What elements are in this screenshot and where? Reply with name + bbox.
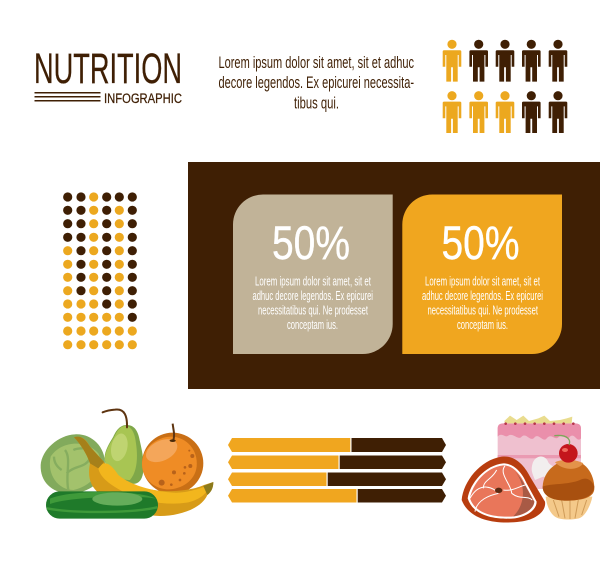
pictogram: people ratio: [443, 40, 567, 133]
icon: muffin with cherry: [543, 435, 594, 519]
bar 1: [228, 438, 446, 452]
text block: left card description: conceptam ius.: [287, 318, 338, 332]
bar 3: [228, 472, 446, 486]
text block: left card description: Lorem ipsum dolor sit amet, sit et: [255, 274, 371, 288]
icon: banana: [74, 437, 213, 516]
icon: pear: [103, 410, 144, 484]
dot matrix chart: [63, 192, 137, 349]
heading: NUTRITION: NUTRITION: [34, 45, 182, 93]
intro text block: [218, 53, 414, 112]
intro text block: Lorem ipsum dolor sit amet, sit et adhuc: [218, 53, 414, 72]
text block: right card description: conceptam ius.: [457, 318, 508, 332]
intro text block: tibus qui.: [294, 94, 339, 112]
chart: horizontal progress bars: [228, 438, 446, 502]
illustration: fruit and vegetables: [41, 410, 213, 519]
panel: right 50% card: [402, 194, 562, 354]
panel: left 50% card: [233, 194, 393, 354]
icon row 2: three of five highlighted: [443, 91, 567, 133]
intro text block: decore legendos. Ex epicurei necessita-: [218, 73, 414, 92]
illustration: meat and sweets: [462, 416, 594, 523]
text block: left card description: [252, 274, 373, 332]
icon: cucumber: [46, 491, 158, 519]
panel: dark statistics background: [188, 162, 600, 389]
bar 2: [228, 456, 446, 469]
decorative title rules: [34, 92, 100, 102]
icon: orange: [142, 424, 203, 494]
text block: right card description: [422, 274, 543, 332]
bar 4: [228, 489, 446, 502]
statistic: left 50%: 50%: [272, 216, 350, 269]
icon row 1: one of five highlighted: [443, 40, 567, 82]
text block: left card description: necessitatibus qui. Ne prodesset: [258, 304, 368, 318]
icon: ham: [462, 456, 545, 523]
icon: layer cake: [498, 416, 581, 489]
subheading: INFOGRAPHIC: INFOGRAPHIC: [104, 91, 182, 106]
icon: cabbage: [41, 434, 105, 493]
text block: left card description: adhuc decore legendos. Ex epicurei: [252, 289, 373, 303]
statistic: right 50%: 50%: [442, 216, 520, 269]
title: Nutrition Infographic: [34, 45, 182, 106]
icon: bone: [532, 457, 563, 480]
